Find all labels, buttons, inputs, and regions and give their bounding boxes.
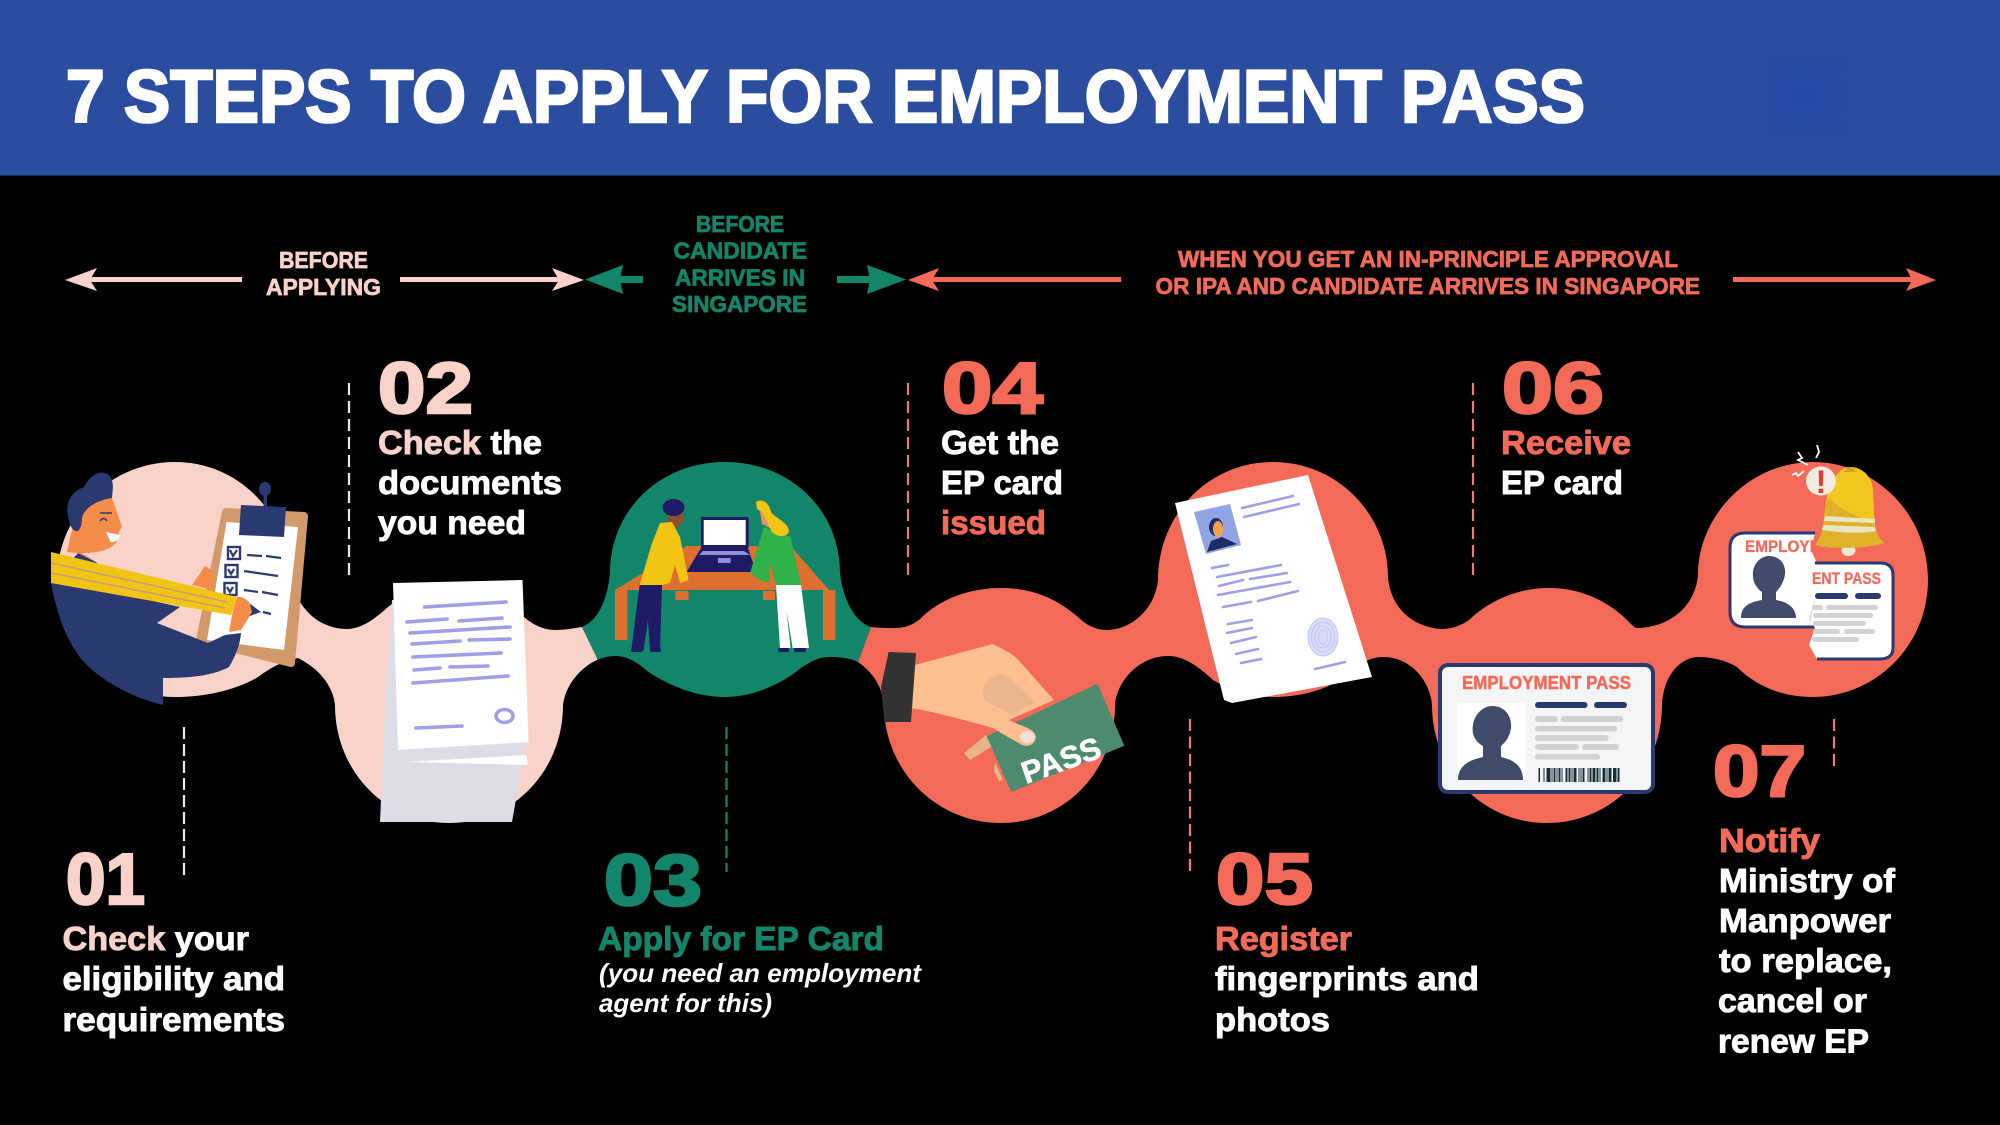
- torn card left piece: [1728, 532, 1817, 628]
- alert sparks: [1792, 445, 1819, 476]
- icon: torn pass and alert bell: [1730, 445, 1893, 659]
- label: before applying: APPLYING: [266, 274, 381, 300]
- card label: PASS: [1017, 730, 1106, 791]
- fingerprint: [1308, 618, 1338, 656]
- label: in-principle approval: OR IPA AND CANDIDATE ARRIVES IN SINGAPORE: [1156, 273, 1700, 299]
- icon: employment pass card: [1440, 665, 1653, 792]
- table: [615, 546, 836, 640]
- description 03: agent for this): [599, 988, 772, 1018]
- number 04: 04: [942, 349, 1043, 429]
- description 01: eligibility and: [62, 960, 285, 997]
- arrow: before applying left: [65, 268, 242, 291]
- torn card right piece: ENT PASS: [1812, 569, 1881, 588]
- description 07: renew EP: [1718, 1022, 1869, 1060]
- header banner: [0, 0, 2000, 176]
- document text lines: [407, 602, 510, 728]
- card photo: [1457, 703, 1525, 780]
- description 05: fingerprints and: [1215, 960, 1479, 997]
- description 03: (you need an employment: [599, 958, 922, 988]
- description 02: [378, 424, 562, 541]
- label: in-principle approval: WHEN YOU GET AN IN-PRINCIPLE APPROVAL: [1178, 246, 1678, 272]
- description 05: Register: [1215, 920, 1352, 957]
- alert badge: !: [1816, 464, 1826, 500]
- step 02 text: [378, 349, 562, 541]
- description 06: Receive: [1501, 424, 1631, 461]
- icon: hand giving a pass card: [881, 644, 1122, 791]
- arrow: approval right: [1733, 268, 1936, 291]
- torn card right piece: [1809, 563, 1893, 659]
- connector: step 05: [1189, 719, 1191, 872]
- icon: application form with photo and fingerprint: [1175, 475, 1372, 703]
- description 07: Manpower: [1719, 902, 1891, 939]
- arrow: candidate right: [837, 265, 906, 294]
- laptop: [686, 517, 756, 572]
- number 03: 03: [604, 841, 702, 921]
- description 05: [1215, 920, 1479, 1038]
- label: before candidate arrives in singapore: BEFORE: [696, 211, 784, 237]
- arrow: before applying right: [400, 268, 584, 291]
- number 05: 05: [1216, 840, 1313, 920]
- step 05 text: [1215, 840, 1479, 1038]
- step 06 text: [1501, 349, 1631, 501]
- timeline: in-principle approval: [908, 246, 1936, 299]
- description 06: [1501, 424, 1631, 501]
- number 07: 07: [1713, 732, 1806, 812]
- label: before applying: BEFORE: [279, 247, 368, 273]
- description 02: you need: [378, 504, 526, 541]
- label: in-principle approval: [1156, 246, 1700, 299]
- man: body: [51, 553, 241, 705]
- description 04: Get the: [941, 424, 1059, 461]
- card barcode: [1538, 768, 1620, 782]
- label: before candidate arrives in singapore: SINGAPORE: [672, 291, 807, 317]
- title: 7 STEPS TO APPLY FOR EMPLOYMENT PASS: [66, 55, 1585, 138]
- description 04: [941, 424, 1063, 541]
- description 04: issued: [941, 504, 1046, 541]
- arrow: approval left: [908, 268, 1121, 291]
- card details: [1535, 702, 1627, 760]
- step 04 text: [941, 349, 1063, 541]
- ribbon: coral section: [858, 462, 1928, 823]
- description 03: [598, 920, 922, 1018]
- connector: step 02: [348, 383, 350, 575]
- man: raised hand: [192, 566, 213, 590]
- connector: step 04: [907, 383, 909, 575]
- man: face: [67, 498, 122, 562]
- step 03 text: [598, 841, 922, 1018]
- icon: man with pencil and checklist: [51, 473, 304, 705]
- clipboard: [200, 482, 304, 663]
- number 02: 02: [378, 349, 473, 429]
- description 04: EP card: [941, 464, 1063, 501]
- description 07: [1718, 822, 1896, 1060]
- number 06: 06: [1502, 349, 1604, 429]
- pencil: [51, 552, 261, 632]
- hand: [911, 644, 1054, 746]
- description 07: cancel or: [1718, 982, 1867, 1019]
- description 02: Check the: [378, 424, 542, 461]
- document stamp: [496, 710, 513, 722]
- connector: step 06: [1472, 383, 1474, 575]
- label: before applying: [266, 247, 381, 300]
- man: smile: [106, 532, 120, 542]
- connector: step 01: [183, 727, 185, 876]
- icon: stack of documents: [380, 580, 529, 822]
- description 01: Check your: [62, 920, 249, 957]
- torn card left piece: EMPLOYMENT: [1745, 537, 1854, 556]
- connector: step 07: [1833, 719, 1835, 768]
- step 01 text: [62, 840, 285, 1038]
- step 07 text: [1713, 732, 1896, 1060]
- label: before candidate arrives in singapore: [672, 211, 807, 317]
- card: [989, 686, 1122, 790]
- form photo: [1194, 504, 1241, 554]
- description 01: requirements: [62, 1001, 285, 1038]
- number 01: 01: [66, 840, 145, 920]
- timeline: before applying: [65, 247, 584, 300]
- ribbon: pink section: [60, 462, 597, 823]
- man: hair: [67, 473, 113, 531]
- description 07: to replace,: [1719, 942, 1892, 979]
- cuff: [881, 652, 916, 722]
- label: before candidate arrives in singapore: CANDIDATE: [674, 238, 807, 264]
- description 01: [62, 920, 285, 1038]
- description 05: photos: [1215, 1001, 1330, 1038]
- description 07: Ministry of: [1719, 862, 1896, 899]
- fingers: [964, 735, 1003, 781]
- form text lines: [1212, 496, 1345, 669]
- timeline: before candidate arrives: [585, 211, 906, 317]
- connector: step 03: [725, 727, 728, 872]
- icon: two people at a table with a laptop: [615, 499, 836, 652]
- alert bell: [1815, 467, 1884, 556]
- label: before candidate arrives in singapore: ARRIVES IN: [675, 264, 805, 290]
- description 07: Notify: [1719, 822, 1821, 859]
- card title: EMPLOYMENT PASS: [1462, 672, 1631, 693]
- ribbon: green section: [582, 462, 871, 697]
- alert badge: [1806, 464, 1836, 500]
- description 03: Apply for EP Card: [598, 920, 884, 957]
- person right: [750, 500, 809, 652]
- arrow: candidate left: [585, 265, 643, 294]
- description 06: EP card: [1501, 464, 1623, 501]
- person left: [631, 499, 689, 652]
- description 02: documents: [378, 464, 562, 501]
